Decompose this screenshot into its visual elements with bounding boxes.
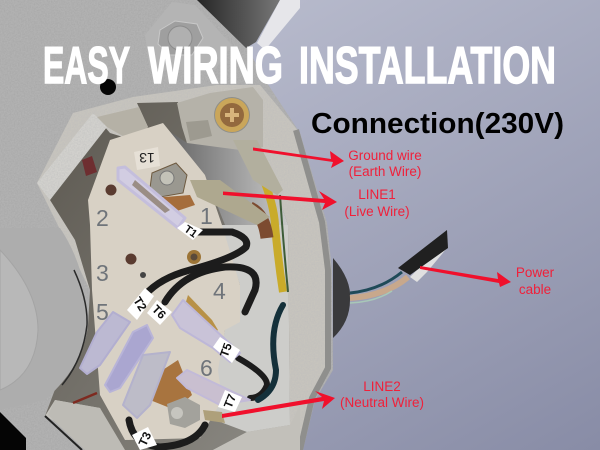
yellow ground wire — [262, 175, 283, 292]
label T2 — [127, 288, 154, 320]
label 13 — [134, 147, 160, 170]
ground lug and screw — [177, 87, 288, 292]
spade connector T5 — [172, 300, 240, 362]
label: ground wire: Ground wire — [348, 148, 422, 163]
power cable — [350, 230, 448, 303]
T1 clear spade — [118, 167, 185, 228]
plate numerals: 3 — [96, 260, 109, 286]
dark cover at top — [197, 0, 280, 48]
plate numerals: 4 — [213, 278, 226, 304]
terminal box rim — [37, 85, 329, 450]
screw hole — [100, 79, 116, 95]
spade connector T7 — [177, 370, 250, 405]
red wire — [73, 393, 97, 403]
label T3 — [132, 427, 157, 450]
lower rim — [213, 405, 300, 450]
label: line 1: LINE1 — [358, 187, 396, 202]
motor end housing — [0, 0, 333, 450]
title: WIRING — [148, 37, 283, 95]
plate holes — [106, 184, 201, 278]
mounting bolt — [145, 2, 232, 70]
outer rim dark edge — [296, 130, 328, 450]
label T5 — [213, 337, 240, 363]
label T7: T7 — [221, 392, 239, 410]
output shaft disc — [0, 228, 88, 450]
lower left rim — [48, 400, 125, 450]
red arrow: power cable — [420, 266, 511, 287]
terminal plate — [82, 123, 240, 440]
label T5: T5 — [217, 341, 235, 359]
plate numerals: 6 — [200, 355, 213, 381]
title — [43, 37, 556, 95]
white cover edge — [257, 0, 300, 50]
line 1 connector and terminal — [118, 163, 270, 228]
label T6 — [147, 300, 172, 325]
title: EASY — [43, 37, 130, 95]
label: line 2: (Neutral Wire) — [340, 395, 424, 410]
ground wire insulation — [233, 140, 283, 195]
label T6: T6 — [149, 302, 169, 322]
red stripe — [82, 156, 97, 176]
terminal box cavity — [37, 102, 300, 450]
spade connector T2 — [80, 312, 130, 374]
red arrow: ground wire — [253, 148, 344, 168]
plate numerals: 2 — [96, 205, 109, 231]
black wires — [129, 232, 283, 447]
label: line 1: (Live Wire) — [344, 204, 410, 219]
label T1: T1 — [182, 223, 199, 240]
black gap line — [45, 416, 82, 450]
wire labels — [127, 222, 242, 450]
plate numerals — [96, 203, 226, 381]
red arrow: line 2 — [222, 391, 335, 418]
neutral nut — [167, 397, 225, 428]
label: line 2: LINE2 — [363, 379, 401, 394]
plate numerals: 1 — [200, 203, 213, 229]
red arrow: line 1 — [223, 191, 337, 210]
black base corner — [0, 412, 26, 450]
plate numerals: 5 — [96, 299, 109, 325]
label T3: T3 — [136, 429, 154, 448]
rubber grommet — [333, 258, 350, 338]
spade connector T6 — [105, 325, 153, 392]
label: power cable: Power — [516, 265, 555, 280]
brass tabs — [185, 295, 218, 335]
white rim strip — [37, 113, 107, 200]
label T7 — [218, 390, 242, 412]
label: ground wire: (Earth Wire) — [349, 164, 421, 179]
label T2: T2 — [130, 294, 150, 314]
brown wire — [250, 208, 267, 238]
subtitle: Connection(230V) — [311, 108, 564, 140]
label T1 — [177, 222, 203, 240]
inner wall ledge — [97, 107, 148, 143]
label 13: 13 — [139, 150, 155, 166]
label: power cable: cable — [519, 282, 551, 297]
spade connector T3 — [123, 352, 170, 418]
